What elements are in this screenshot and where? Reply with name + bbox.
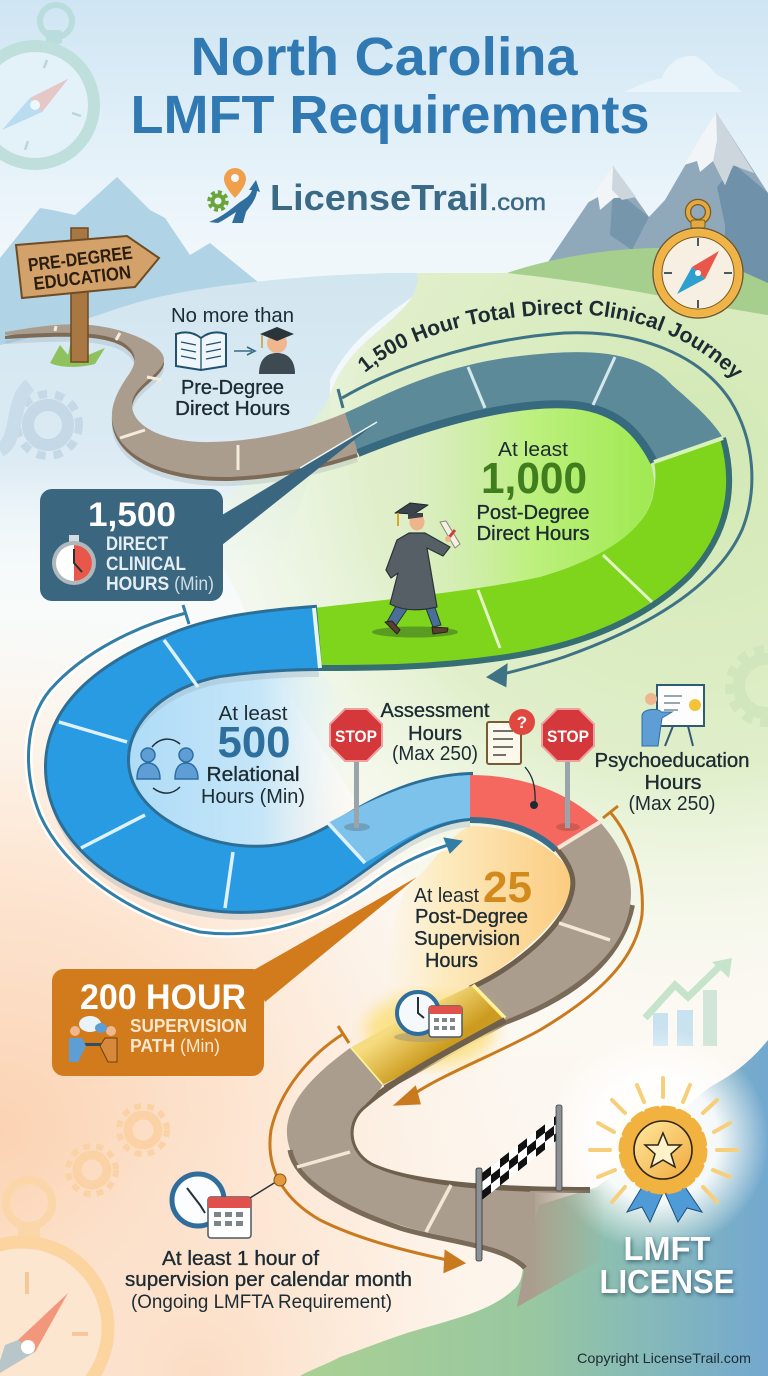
text: assessment hours: Assessment (380, 700, 490, 722)
text: psychoeducation hours: Hours (644, 772, 702, 794)
icon: clipboard question: ? (517, 713, 527, 732)
road: tan final section (287, 1020, 605, 1307)
text: psychoeducation hours: Psychoeducation (594, 750, 750, 772)
hill: green (507, 248, 768, 315)
faint gear: left (0, 385, 79, 456)
leader line: assessment (525, 767, 538, 809)
cloud (624, 56, 742, 92)
text: 1,000 post-degree hours: Direct Hours (476, 523, 590, 545)
icon: stop sign right: STOP (547, 727, 589, 746)
arrow: total clinical journey bracket (338, 333, 752, 685)
text: 25 post-degree supervision hours (414, 863, 532, 972)
panel: inner yellow area (389, 826, 573, 1035)
text: 500 relational hours: At least (218, 703, 288, 725)
text: 1,000 post-degree hours: At least (498, 439, 568, 461)
callout: 1,500 direct clinical hours: CLINICAL (106, 554, 186, 575)
text: monthly supervision requirement (125, 1248, 412, 1313)
arrow: supervision bracket left (270, 1026, 463, 1271)
callout: 1,500 direct clinical hours: HOURS (Min) (106, 574, 214, 595)
icon: grass (50, 335, 105, 367)
text: LMFT license: LMFT (624, 1230, 710, 1267)
icon: license medal (590, 1078, 737, 1222)
icon: logo road (209, 180, 260, 223)
text: 25 post-degree supervision hours: 25 (483, 863, 532, 912)
text: pre-degree label: No more than (171, 305, 294, 327)
icon: stop sign right (542, 709, 594, 831)
text: 500 relational hours: Hours (Min) (201, 786, 305, 808)
copyright: Copyright LicenseTrail.com (577, 1350, 751, 1366)
glow: medal (545, 1028, 768, 1252)
callout: 1,500 direct clinical hours: 1,500 (88, 496, 176, 534)
faint compass: top left (0, 5, 94, 164)
callout: 200 hour supervision path: SUPERVISION (130, 1016, 247, 1036)
text: pre-degree label (171, 305, 294, 420)
text: 25 post-degree supervision hours: Hours (425, 950, 478, 972)
corner: green and blue landscape (300, 1040, 768, 1376)
text: 1,000 post-degree hours: 1,000 (481, 454, 587, 503)
text: 25 post-degree supervision hours: At least (414, 885, 479, 907)
finish flag (476, 1105, 562, 1261)
compass: top right (653, 202, 743, 318)
icon: clock and calendar (172, 1174, 251, 1238)
road: teal section (345, 352, 723, 462)
icon: stop sign left: STOP (335, 727, 377, 746)
faint gears: peach (68, 1106, 167, 1194)
text: monthly supervision requirement: At least 1 hour of (162, 1248, 319, 1270)
text: 25 post-degree supervision hours: Post-Degree (415, 906, 528, 928)
road: tan descending section (385, 822, 632, 1088)
icon: clipboard question (487, 709, 535, 764)
road: blue section (47, 608, 470, 920)
arrow: relational bracket (29, 605, 462, 934)
text: 500 relational hours: Relational (206, 764, 300, 786)
faint gear: right (729, 649, 768, 723)
icon: logo gear (209, 192, 227, 210)
title: North Carolina (190, 27, 578, 87)
road: green section (314, 438, 729, 668)
text: 500 relational hours (201, 703, 305, 808)
text: pre-degree label: Pre-Degree (181, 377, 284, 399)
arrow: supervision bracket right (397, 806, 642, 1104)
text: assessment hours: Hours (408, 723, 462, 745)
callout: 1,500 direct clinical hours (40, 422, 377, 601)
text: 25 post-degree supervision hours: Supervision (414, 928, 520, 950)
icon: open book (176, 332, 226, 370)
arc label: total journey: 1,500 Hour Total Direct Clinical Journey (358, 300, 742, 378)
callout: 1,500 direct clinical hours: DIRECT (106, 534, 168, 555)
panel: inner blue area (129, 672, 345, 848)
icon: relational people (137, 739, 198, 793)
icon: stopwatch (52, 535, 96, 585)
icon: clock and calendar on road (394, 992, 462, 1042)
text: 1,000 post-degree hours: Post-Degree (476, 502, 590, 524)
text: LMFT license (600, 1230, 734, 1300)
callout: 200 hour supervision path (52, 877, 417, 1076)
title: LMFT Requirements (130, 85, 650, 145)
text: pre-degree label: Direct Hours (175, 398, 290, 420)
faint compass: bottom left (0, 1180, 108, 1376)
panel: inner green area (300, 404, 654, 608)
text: assessment hours (380, 700, 490, 765)
text: monthly supervision requirement: supervision per calendar month (125, 1269, 412, 1291)
logo text: LicenseTrail (270, 177, 489, 218)
icon: graduate bust (259, 327, 295, 374)
icon: supervision meeting (69, 1016, 117, 1062)
text: LMFT license: LICENSE (600, 1263, 734, 1300)
background: pale blue and green fields (0, 273, 768, 1000)
text: 1,000 post-degree hours (476, 439, 590, 545)
text: assessment hours: (Max 250) (392, 743, 478, 765)
road: gold section (350, 985, 505, 1085)
logo (209, 168, 546, 223)
text: psychoeducation hours (594, 750, 750, 815)
title (130, 27, 650, 145)
icon: logo pin (224, 168, 246, 198)
signpost: PRE-DEGREE (27, 242, 134, 275)
road: red section (470, 775, 600, 850)
logo domain: .com (490, 189, 546, 215)
icon: presenter (642, 685, 704, 746)
text: 500 relational hours: 500 (218, 718, 290, 767)
mountains: left (0, 177, 258, 350)
signpost (16, 228, 159, 367)
text: psychoeducation hours: (Max 250) (628, 793, 716, 815)
mountains: right (546, 112, 768, 320)
icon: arrow to graduate (234, 347, 255, 355)
icon: graduate walking (372, 503, 460, 638)
road: pre-degree section (5, 324, 358, 486)
icon: stop sign left (330, 709, 382, 831)
callout: 200 hour supervision path: 200 HOUR (80, 978, 246, 1017)
signpost: EDUCATION (32, 261, 132, 294)
callout: 200 hour supervision path: PATH (Min) (130, 1036, 220, 1056)
leader line: monthly supervision (250, 1174, 286, 1198)
faint chart icon (645, 958, 732, 1046)
text: monthly supervision requirement: (Ongoing LMFTA Requirement) (131, 1292, 392, 1313)
